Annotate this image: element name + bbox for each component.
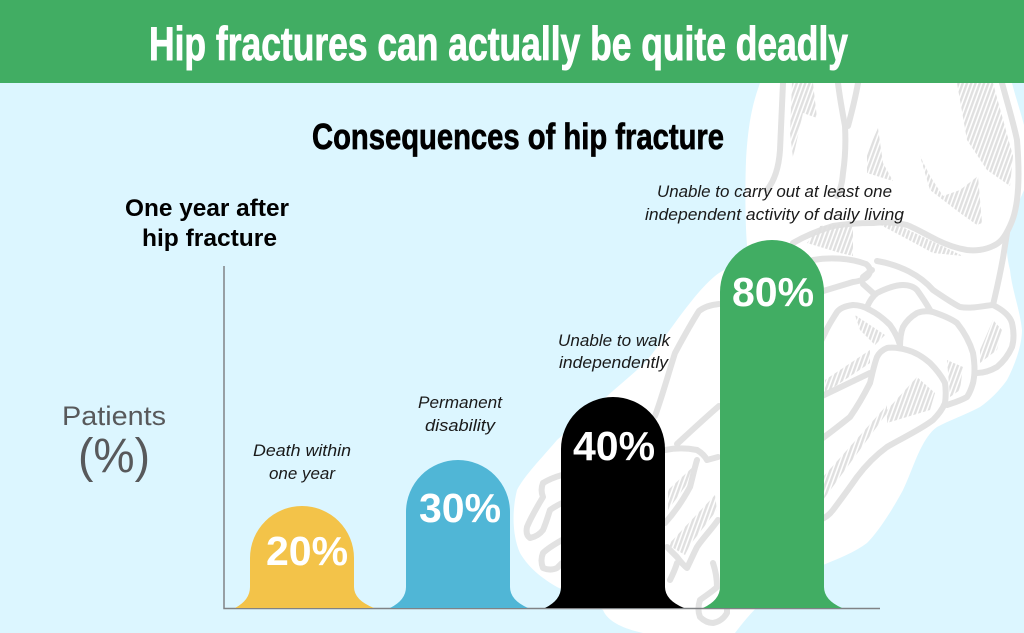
illustration: foot skeleton (514, 83, 1024, 633)
bar: 80 percent unable to carry out daily living activity: independent activity of daily living (645, 206, 905, 224)
bar: 40 percent unable to walk independently: Unable to walk (558, 332, 671, 350)
y axis label: patients percent: (%) (78, 430, 150, 483)
bar: 80 percent unable to carry out daily living activity: 80% (732, 269, 814, 315)
y axis label: patients percent: Patients (62, 401, 166, 431)
bar: 40 percent unable to walk independently (545, 332, 684, 608)
bar: 80 percent unable to carry out daily living activity: Unable to carry out at least one (657, 183, 892, 201)
bar: 30 percent permanent disability (390, 394, 528, 608)
subheading: one year after hip fracture: One year after (125, 195, 289, 222)
bar: 20 percent death within one year: 20% (266, 528, 348, 574)
subheading: one year after hip fracture: hip fracture (142, 225, 277, 252)
bar: 40 percent unable to walk independently: independently (559, 354, 670, 372)
bar: 20 percent death within one year (235, 442, 374, 608)
chart axes (224, 266, 880, 608)
bar: 40 percent unable to walk independently: 40% (573, 423, 655, 469)
bar: 20 percent death within one year: Death within (253, 442, 351, 460)
bar: 20 percent death within one year: one year (269, 465, 337, 483)
header banner (0, 0, 1024, 83)
bar: 30 percent permanent disability: disability (425, 417, 497, 435)
chart heading: Consequences of hip fracture (312, 116, 724, 157)
bar: 80 percent unable to carry out daily living activity (645, 183, 905, 608)
subheading: one year after hip fracture (125, 195, 289, 252)
bar: 30 percent permanent disability: Permanent (418, 394, 503, 412)
bone shading hatches (668, 83, 1013, 555)
bar chart (224, 183, 905, 608)
bone outlines (527, 83, 1018, 623)
foot silhouette (514, 83, 1024, 633)
bar: 30 percent permanent disability: 30% (419, 485, 501, 531)
y axis label: patients percent (62, 401, 166, 483)
